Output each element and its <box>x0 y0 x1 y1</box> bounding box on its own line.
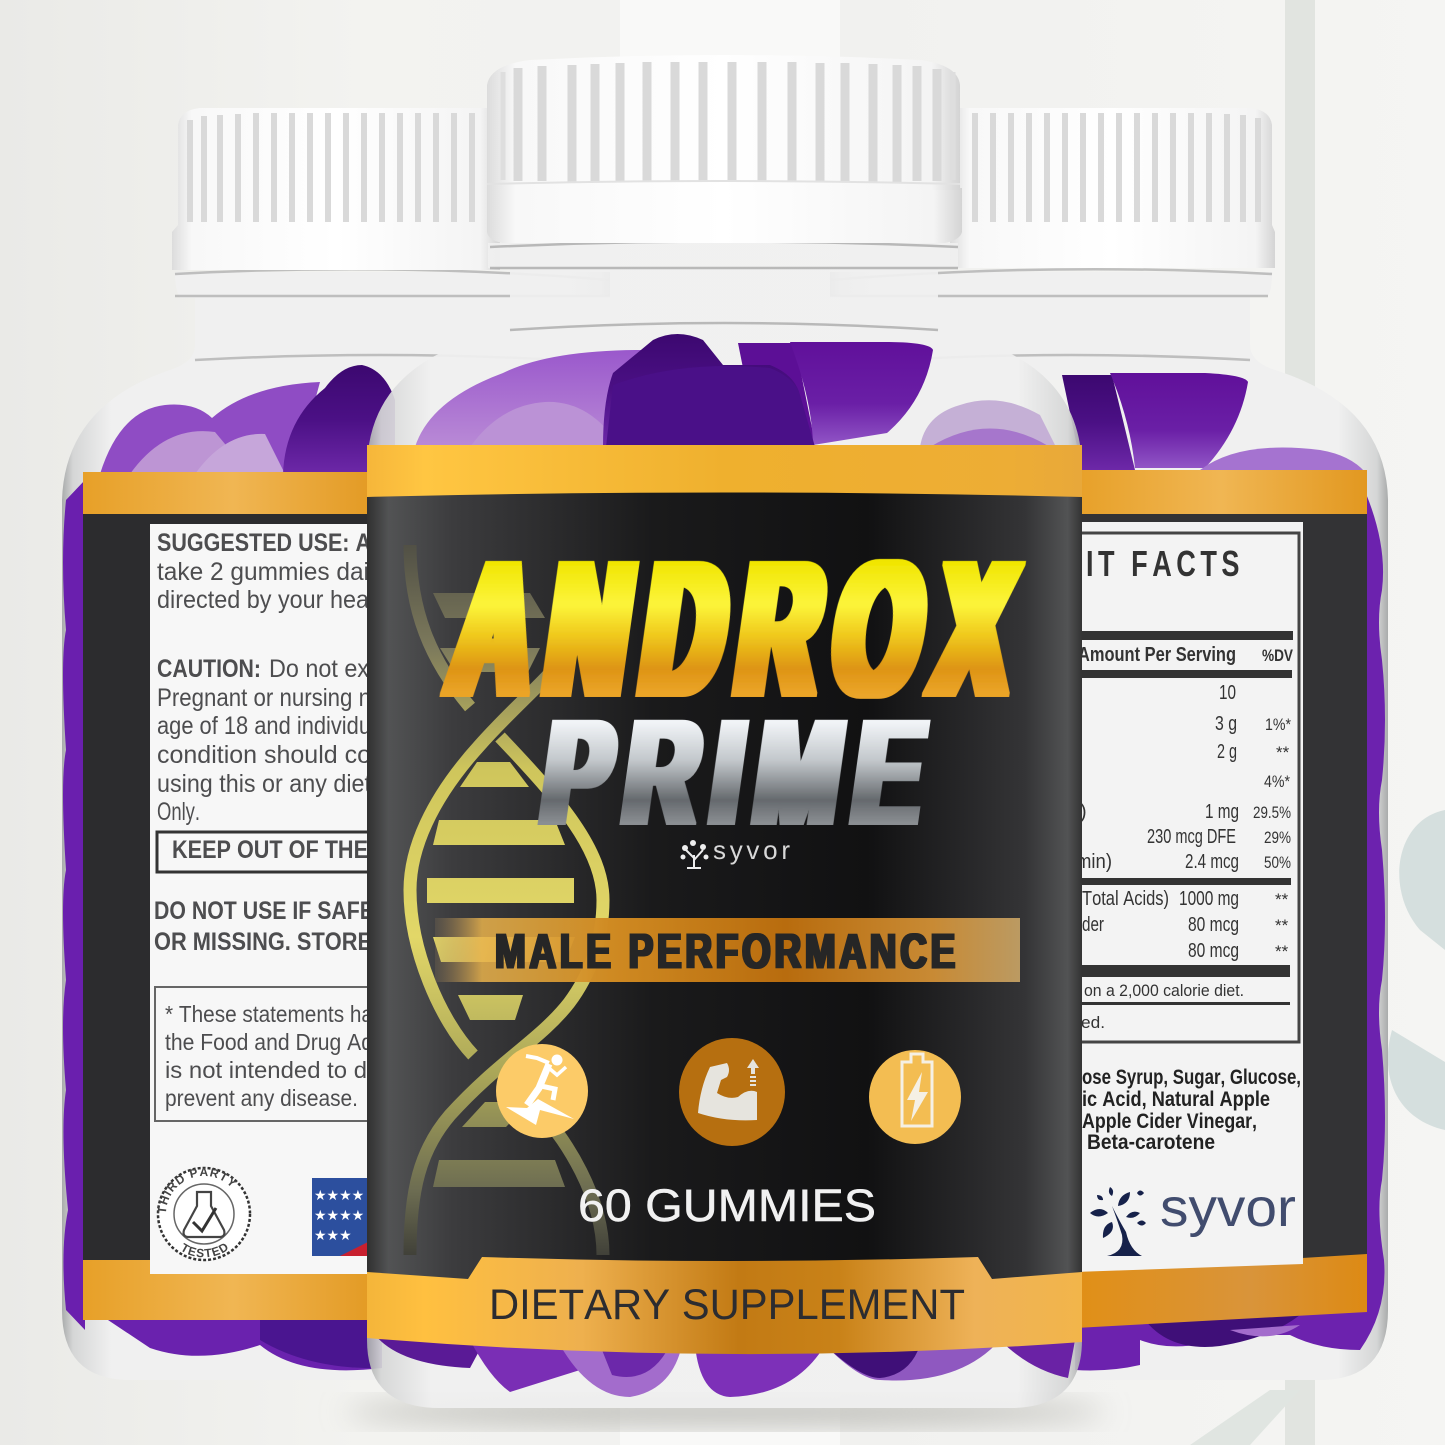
center gummies <box>375 334 1076 1397</box>
supplement facts box: 80 mcg <box>1188 914 1239 936</box>
left label text: directed by your hea <box>157 586 369 614</box>
syvor logo: syvor <box>1160 1178 1296 1238</box>
icon: third party tested badge: TESTED <box>182 1242 228 1258</box>
icon: battery <box>869 1050 961 1144</box>
DNA helix <box>410 545 603 1255</box>
supplement facts box: ** <box>1275 890 1289 909</box>
ingredients text <box>1082 1066 1301 1154</box>
syvor small logo <box>680 835 790 868</box>
supplement facts box: 80 mcg <box>1188 940 1239 962</box>
icon: usa flag: ★★★★ <box>314 1207 364 1223</box>
supplement facts box: %DV <box>1262 646 1294 665</box>
left label text: take 2 gummies dai <box>157 558 369 586</box>
icon: runner <box>496 1044 588 1138</box>
supplement facts box: Total Acids) <box>1082 888 1169 910</box>
supplement facts box: IT FACTS <box>1086 543 1244 584</box>
supplement facts box: 29.5% <box>1253 803 1291 822</box>
supplement facts box: min) <box>1076 851 1112 873</box>
left label text: condition should co <box>157 741 371 769</box>
title: PRIME: PRIME <box>533 689 950 857</box>
left label text: * These statements ha <box>165 1001 373 1027</box>
icon: third party tested badge <box>156 1166 252 1262</box>
center bottle <box>367 55 1082 1408</box>
icon: third party tested badge: THIRD PARTY <box>158 1168 238 1214</box>
left label text: using this or any diet <box>157 770 371 798</box>
left label text: CAUTION: <box>157 655 261 683</box>
center cap <box>487 55 962 243</box>
supplement facts box: 10 <box>1219 682 1236 704</box>
supplement facts box <box>1075 533 1299 1042</box>
supplement facts box: 29% <box>1264 828 1291 847</box>
supplement facts box: ** <box>1276 743 1290 762</box>
ingredients text: Beta-carotene <box>1087 1131 1215 1154</box>
right label <box>1075 470 1367 1328</box>
supplement facts box: 4%* <box>1264 772 1290 791</box>
left gummies <box>63 365 395 1370</box>
supplement facts box: ed. <box>1081 1013 1105 1032</box>
left label text: DO NOT USE IF SAFE <box>154 897 374 925</box>
center label <box>367 445 1082 1354</box>
ingredients text: Apple Cider Vinegar, <box>1082 1110 1257 1133</box>
male performance band: MALE PERFORMANCE <box>495 925 959 979</box>
right bottle cap <box>950 108 1275 268</box>
icon: usa flag: ★★★ <box>314 1227 352 1243</box>
syvor logo <box>1090 1187 1295 1256</box>
supplement facts box: 50% <box>1264 853 1291 872</box>
supplement facts box: 230 mcg DFE <box>1147 826 1236 848</box>
left label text: is not intended to d <box>165 1057 367 1083</box>
dietary supplement: DIETARY SUPPLEMENT <box>489 1281 965 1329</box>
left label text: prevent any disease. <box>165 1085 358 1111</box>
left label text: KEEP OUT OF THE <box>172 836 368 864</box>
supplement facts box: der <box>1082 914 1104 936</box>
left white panel <box>150 524 390 1274</box>
supplement facts box: 1%* <box>1265 715 1291 734</box>
supplement facts box: ) <box>1080 801 1087 823</box>
left label text <box>154 529 375 1121</box>
left label text: Pregnant or nursing n <box>157 684 371 712</box>
left label text: Do not ex <box>269 655 369 683</box>
left bottle <box>62 108 510 1372</box>
left label text: the Food and Drug Ad <box>165 1029 373 1055</box>
male performance band <box>435 918 1020 982</box>
ingredients text: ose Syrup, Sugar, Glucose, <box>1082 1066 1301 1089</box>
left label text: age of 18 and individu <box>157 712 371 740</box>
title: ANDROX: ANDROX <box>440 522 1044 737</box>
left label text: Only. <box>157 798 200 826</box>
supplement facts box: 2.4 mcg <box>1185 851 1239 873</box>
supplement facts box: on a 2,000 calorie diet. <box>1084 981 1244 1000</box>
60 gummies: 60 GUMMIES <box>578 1180 876 1231</box>
right bottle glass <box>830 272 1388 1380</box>
right gummies <box>1062 373 1385 1370</box>
supplement facts box: ** <box>1275 942 1289 961</box>
supplement facts box: 3 g <box>1215 713 1237 735</box>
ingredients text: ic Acid, Natural Apple <box>1082 1088 1270 1111</box>
bottom orange banner <box>367 1257 1082 1354</box>
center bottle glass <box>367 243 1082 1408</box>
supplement facts box: 2 g <box>1217 741 1237 763</box>
left label text: OR MISSING. STORE <box>154 928 372 956</box>
syvor small logo: syvor <box>713 835 790 865</box>
icon: usa flag: ★★★★ <box>314 1187 364 1203</box>
icon: usa flag <box>312 1178 372 1256</box>
left bottle cap <box>172 108 500 270</box>
supplement facts box: 1 mg <box>1205 801 1239 823</box>
icon: muscle arm <box>679 1038 785 1146</box>
right white panel <box>1075 522 1303 1272</box>
supplement facts box: ** <box>1275 916 1289 935</box>
left label <box>83 472 367 1320</box>
supplement facts box: Amount Per Serving <box>1078 644 1236 666</box>
supplement facts box: 1000 mg <box>1179 888 1239 910</box>
left label text: SUGGESTED USE: A <box>157 529 371 557</box>
right bottle <box>938 108 1388 1380</box>
left bottle glass <box>62 272 610 1380</box>
